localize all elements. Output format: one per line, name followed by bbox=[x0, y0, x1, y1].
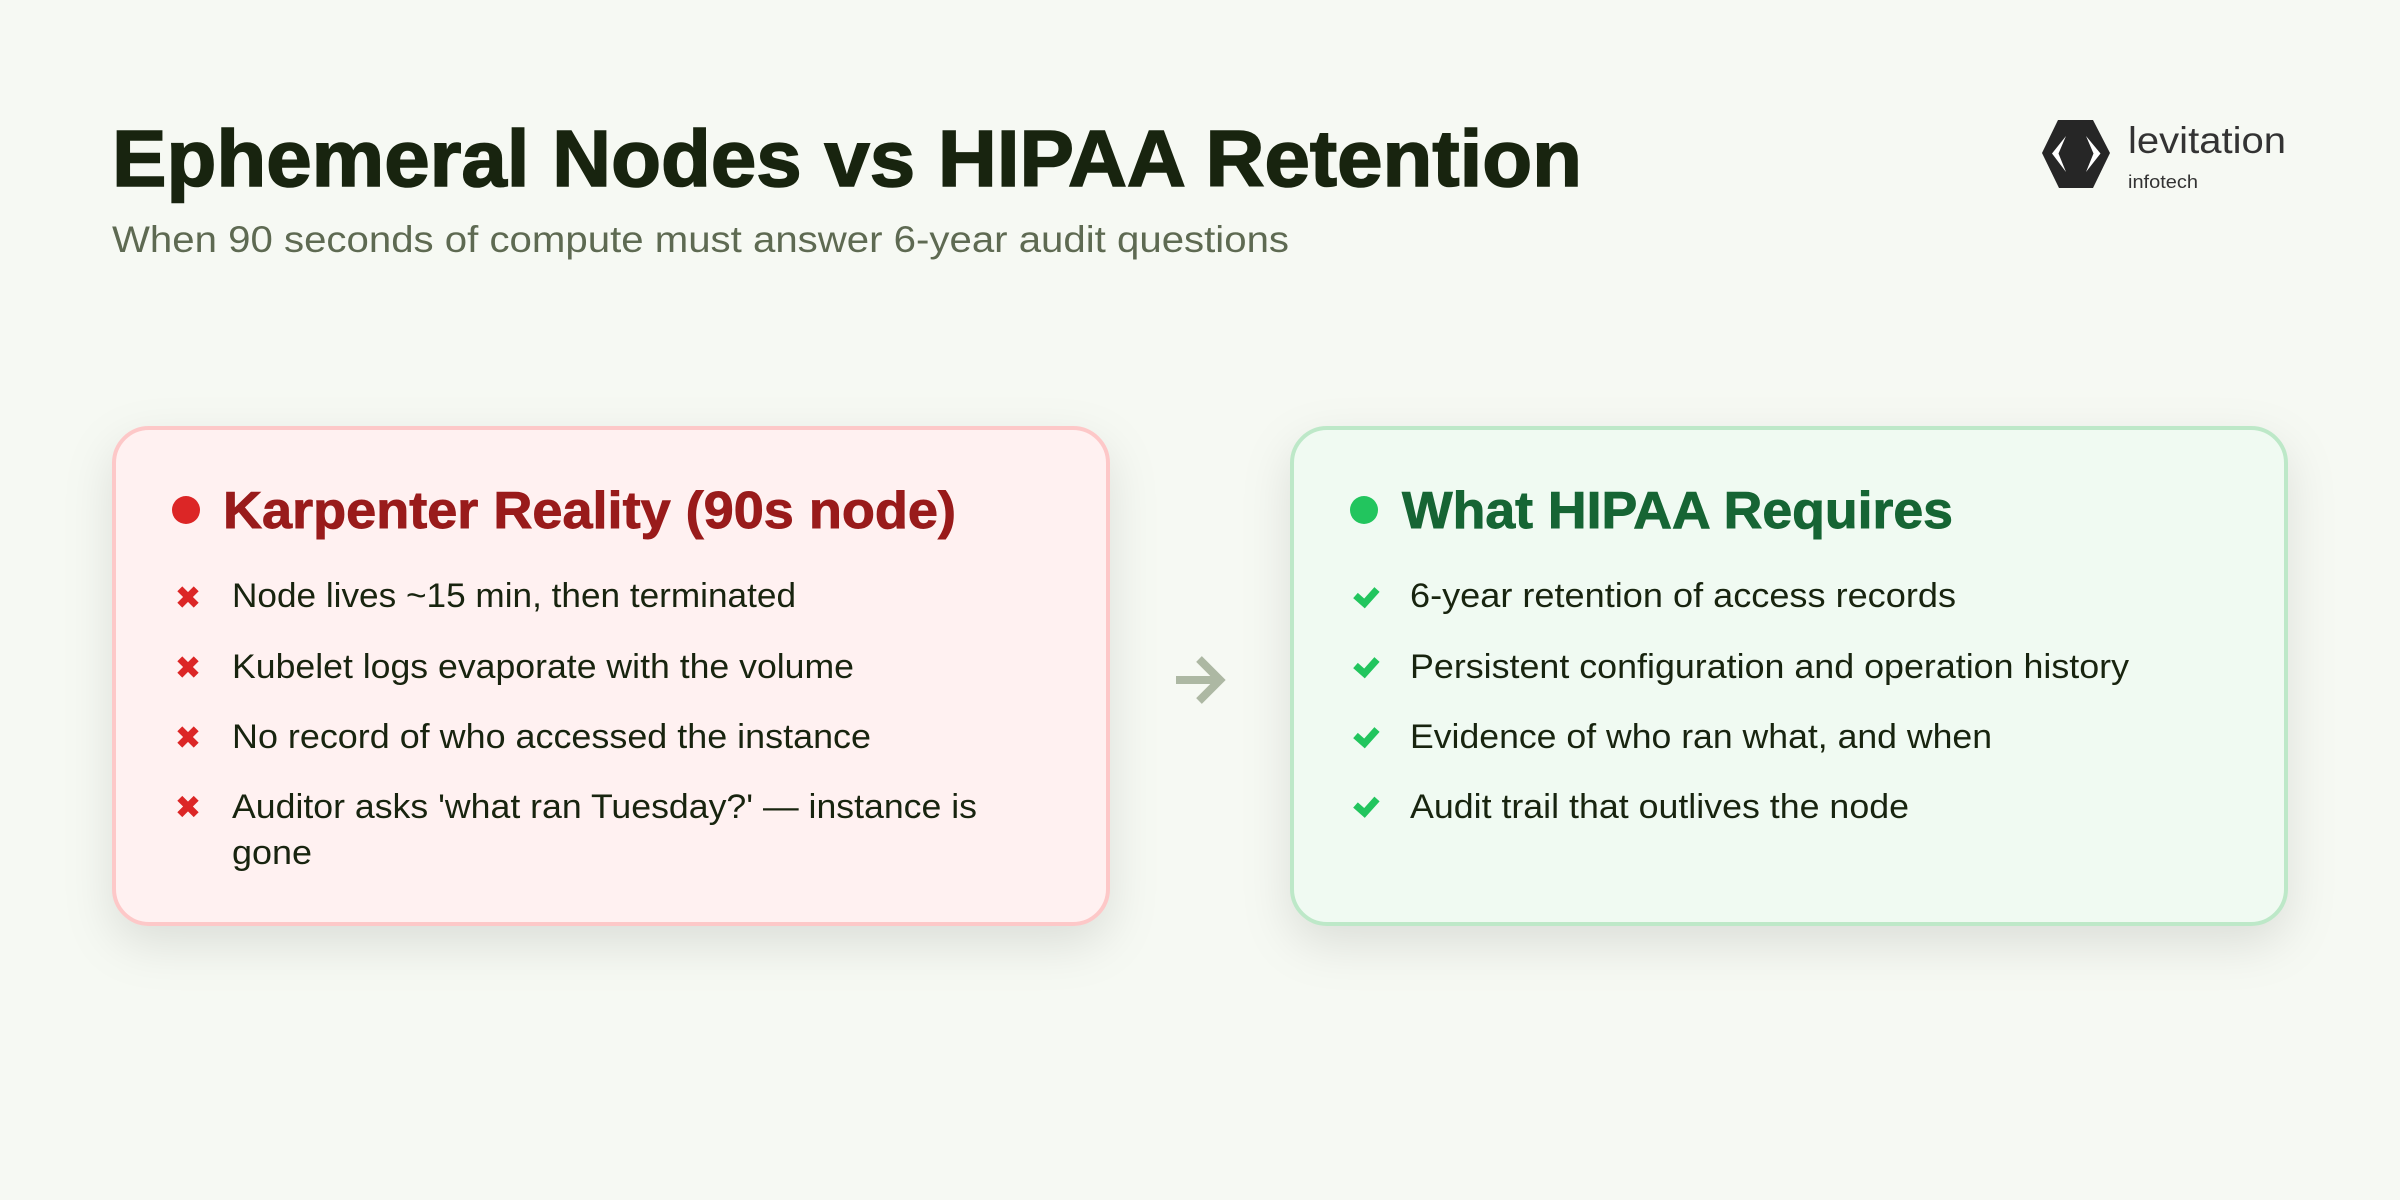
icon: hexagon logo mark bbox=[2042, 120, 2110, 188]
list item 3: No record of who accessed the instance bbox=[232, 718, 871, 756]
panel heading: What HIPAA Requires bbox=[1402, 482, 1953, 540]
list item 3: Evidence of who ran what, and when bbox=[1410, 718, 1992, 756]
heading dot bbox=[1350, 496, 1378, 524]
heading dot bbox=[172, 496, 200, 524]
logo tagline: infotech bbox=[2128, 172, 2198, 192]
logo wordmark: levitation bbox=[2128, 120, 2286, 161]
list item 1: 6-year retention of access records bbox=[1410, 577, 1956, 615]
list item 4: Auditor asks 'what ran Tuesday?' — instance is bbox=[232, 788, 977, 826]
panel: what HIPAA requires bbox=[1292, 428, 2286, 924]
list item 2: Persistent configuration and operation history bbox=[1410, 648, 2130, 686]
logo: levitation infotech bbox=[2042, 120, 2286, 192]
list item 4 bbox=[180, 788, 977, 872]
list item 1: Node lives ~15 min, then terminated bbox=[232, 577, 796, 615]
panel heading: Karpenter Reality (90s node) bbox=[223, 482, 956, 540]
subtitle: When 90 seconds of compute must answer 6-year audit questions bbox=[112, 219, 1289, 260]
title: Ephemeral Nodes vs HIPAA Retention bbox=[112, 114, 1582, 203]
panel background bbox=[1292, 428, 2286, 924]
panel: Karpenter reality bbox=[114, 428, 1108, 924]
list item 2: Kubelet logs evaporate with the volume bbox=[232, 648, 854, 686]
panel background bbox=[114, 428, 1108, 924]
arrow bbox=[1176, 659, 1220, 701]
list item 4: Audit trail that outlives the node bbox=[1410, 788, 1909, 826]
list item 4: gone bbox=[232, 834, 312, 872]
